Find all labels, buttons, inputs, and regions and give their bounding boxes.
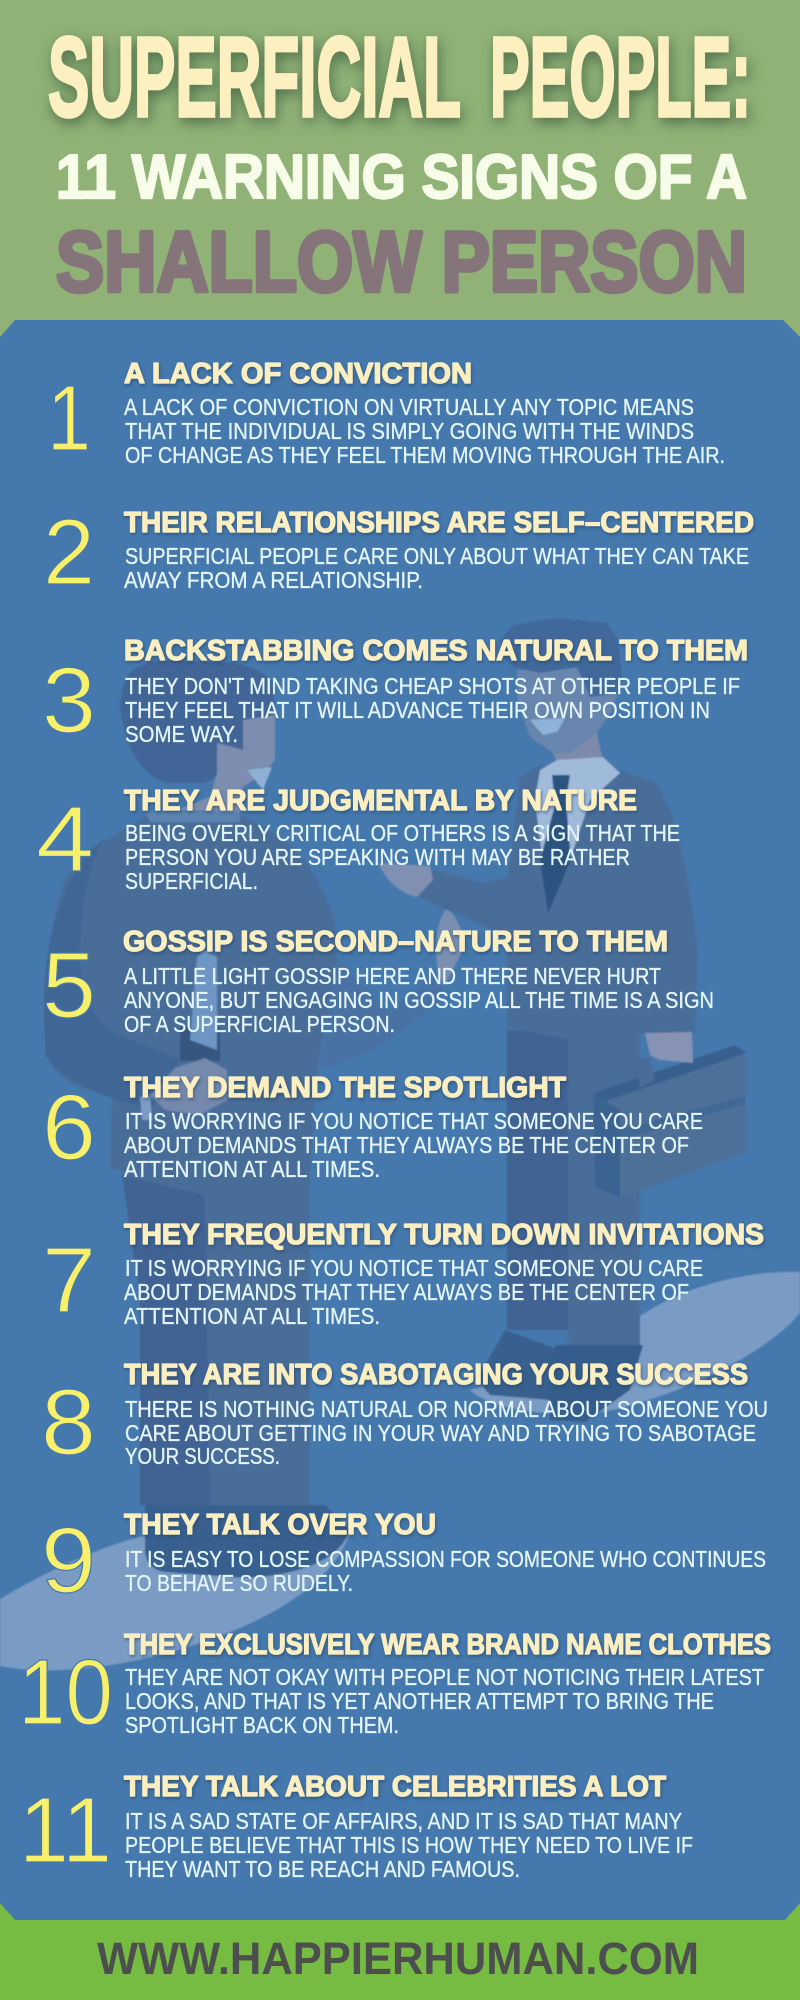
body 7: ATTENTION AT ALL TIMES. xyxy=(124,1303,380,1329)
knife sleeve xyxy=(180,1027,220,1061)
left man outer arm xyxy=(44,840,180,1110)
heading 5: GOSSIP IS SECOND–NATURE TO THEM xyxy=(123,926,668,958)
body 3: THEY FEEL THAT IT WILL ADVANCE THEIR OWN POSITION IN xyxy=(125,697,710,723)
briefcase side xyxy=(593,1093,620,1198)
item 2 xyxy=(43,500,754,604)
briefcase top xyxy=(593,1045,747,1103)
heading 9: THEY TALK OVER YOU xyxy=(124,1509,436,1541)
body 11: THEY WANT TO BE REACH AND FAMOUS. xyxy=(125,1856,520,1882)
heading 6: THEY DEMAND THE SPOTLIGHT xyxy=(124,1072,566,1104)
body 9: TO BEHAVE SO RUDELY. xyxy=(125,1570,353,1596)
number 7: 7 xyxy=(42,1228,96,1332)
item 1 xyxy=(47,358,725,470)
number 3: 3 xyxy=(42,648,96,752)
right man legs xyxy=(507,1030,640,1330)
body 2: AWAY FROM A RELATIONSHIP. xyxy=(124,567,423,593)
title xyxy=(48,14,751,310)
blue content panel xyxy=(0,320,800,1920)
left man neck and face xyxy=(177,712,275,812)
heading 3: BACKSTABBING COMES NATURAL TO THEM xyxy=(124,635,748,667)
body 6: IT IS WORRYING IF YOU NOTICE THAT SOMEONE YOU CARE xyxy=(125,1108,703,1134)
left man jacket xyxy=(44,815,337,1170)
right man raised arm xyxy=(417,870,510,937)
shirt cuff xyxy=(140,1095,152,1120)
left businessman xyxy=(44,660,463,1578)
briefcase body xyxy=(593,1052,745,1198)
footer background xyxy=(0,1895,800,2000)
heading 4: THEY ARE JUDGMENTAL BY NATURE xyxy=(124,785,637,817)
right man hand on briefcase xyxy=(645,1032,693,1063)
title line 2: 11 WARNING SIGNS OF A xyxy=(56,143,747,212)
knife blade xyxy=(190,950,217,1050)
hand holding knife xyxy=(150,1058,227,1115)
body 5: ANYONE, BUT ENGAGING IN GOSSIP ALL THE TIME IS A SIGN xyxy=(124,987,714,1013)
body 4: SUPERFICIAL. xyxy=(125,868,258,894)
left man collar xyxy=(145,812,240,822)
title line 1 xyxy=(48,14,751,140)
briefcase handle xyxy=(635,1057,655,1088)
item 11 xyxy=(19,1771,693,1882)
body 11: IT IS A SAD STATE OF AFFAIRS, AND IT IS SAD THAT MANY xyxy=(125,1808,682,1834)
left man hair xyxy=(120,660,275,783)
item 9 xyxy=(41,1508,766,1612)
body 6: ATTENTION AT ALL TIMES. xyxy=(124,1156,380,1182)
left man extended arm xyxy=(320,960,445,1070)
body 3: SOME WAY. xyxy=(125,721,238,747)
number 11: 11 xyxy=(19,1778,112,1882)
footer url: WWW.HAPPIERHUMAN.COM xyxy=(97,1933,699,1984)
body 1: THAT THE INDIVIDUAL IS SIMPLY GOING WITH THE WINDS xyxy=(125,418,694,444)
right businessman xyxy=(378,618,747,1422)
left man extended hand xyxy=(436,908,463,985)
right man face xyxy=(517,668,618,753)
number 4: 4 xyxy=(36,787,94,891)
number 10: 10 xyxy=(18,1640,113,1744)
number 5: 5 xyxy=(42,933,96,1037)
number 2: 2 xyxy=(43,500,95,604)
item 8 xyxy=(41,1359,768,1474)
body 5: A LITTLE LIGHT GOSSIP HERE AND THERE NEVER HURT xyxy=(124,963,661,989)
number 9: 9 xyxy=(41,1508,96,1612)
item 7 xyxy=(42,1219,764,1332)
body 4: BEING OVERLY CRITICAL OF OTHERS IS A SIGN THAT THE xyxy=(125,820,680,846)
right man tie xyxy=(540,775,571,913)
item 5 xyxy=(42,926,714,1037)
floor shadow ellipse right xyxy=(470,1272,800,1414)
body 11: PEOPLE BELIEVE THAT THIS IS HOW THEY NEED TO LIVE IF xyxy=(125,1832,693,1858)
heading 1: A LACK OF CONVICTION xyxy=(124,358,472,390)
body 5: OF A SUPERFICIAL PERSON. xyxy=(124,1011,395,1037)
floor shadow ellipse left xyxy=(0,1532,350,1670)
item 10 xyxy=(18,1629,771,1744)
header background xyxy=(0,0,800,345)
item 3 xyxy=(42,635,748,752)
body 10: SPOTLIGHT BACK ON THEM. xyxy=(125,1712,399,1738)
right man mouth xyxy=(530,718,565,735)
right man shirt collar xyxy=(535,757,620,880)
body 4: PERSON YOU ARE SPEAKING WITH MAY BE RATHER xyxy=(125,844,630,870)
right man jacket xyxy=(507,765,698,1043)
number 8: 8 xyxy=(41,1370,96,1474)
heading 11: THEY TALK ABOUT CELEBRITIES A LOT xyxy=(124,1771,666,1803)
body 7: ABOUT DEMANDS THAT THEY ALWAYS BE THE CENTER OF xyxy=(124,1279,689,1305)
body 7: IT IS WORRYING IF YOU NOTICE THAT SOMEONE YOU CARE xyxy=(125,1255,703,1281)
body 6: ABOUT DEMANDS THAT THEY ALWAYS BE THE CENTER OF xyxy=(124,1132,689,1158)
briefcase stripe xyxy=(620,1096,745,1140)
right man shoes xyxy=(477,1330,560,1400)
item 6 xyxy=(42,1072,703,1182)
body 8: YOUR SUCCESS. xyxy=(125,1443,280,1469)
body 10: LOOKS, AND THAT IS YET ANOTHER ATTEMPT TO BRING THE xyxy=(125,1688,714,1714)
number 1: 1 xyxy=(47,366,91,470)
body 1: A LACK OF CONVICTION ON VIRTUALLY ANY TOPIC MEANS xyxy=(124,394,694,420)
heading 2: THEIR RELATIONSHIPS ARE SELF–CENTERED xyxy=(124,507,754,539)
heading 8: THEY ARE INTO SABOTAGING YOUR SUCCESS xyxy=(124,1359,748,1391)
heading 7: THEY FREQUENTLY TURN DOWN INVITATIONS xyxy=(124,1219,764,1251)
right man hair xyxy=(500,618,622,697)
left man shoes xyxy=(145,1505,350,1578)
number 6: 6 xyxy=(42,1075,96,1179)
briefcase xyxy=(593,1045,747,1198)
item 4 xyxy=(36,785,680,894)
right man raised hand xyxy=(378,863,433,897)
right man neck xyxy=(553,733,602,762)
title word 1: SUPERFICIAL xyxy=(48,14,461,140)
body 1: OF CHANGE AS THEY FEEL THEM MOVING THROUGH THE AIR. xyxy=(125,442,725,468)
left man legs xyxy=(122,1170,310,1505)
illustration: two businessmen xyxy=(0,618,800,1670)
